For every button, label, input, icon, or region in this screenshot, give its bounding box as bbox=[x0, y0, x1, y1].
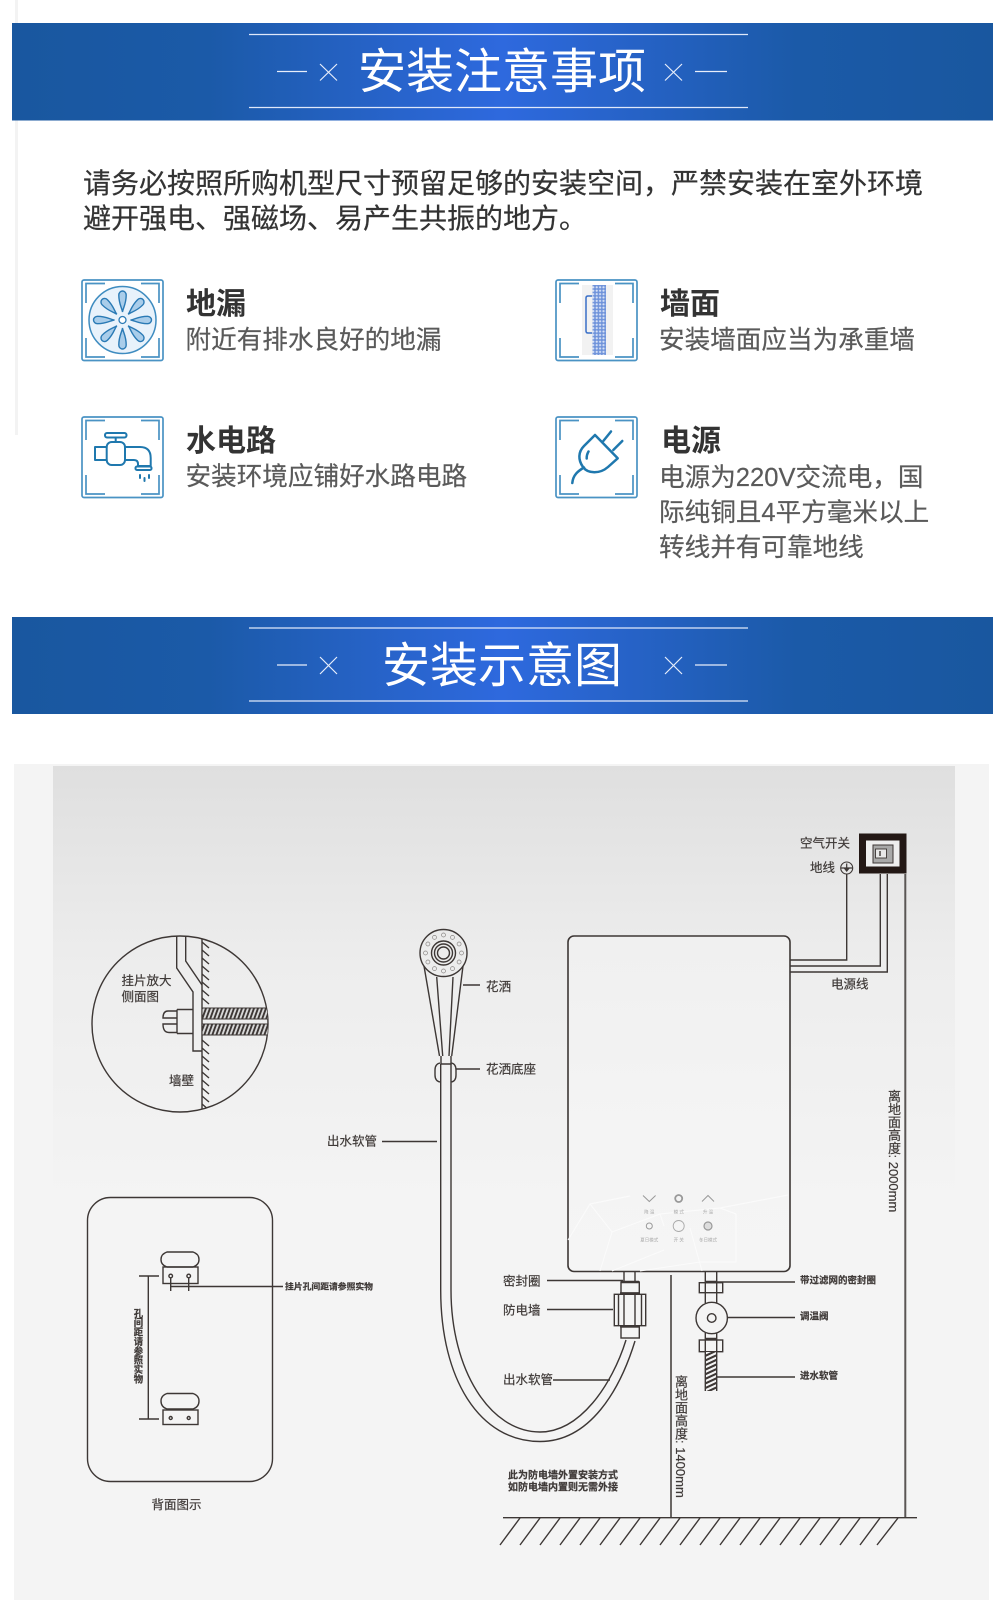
title: 安装注意事项 bbox=[358, 46, 646, 99]
label: 空气开关 bbox=[800, 836, 850, 850]
caption: 背面图示 bbox=[152, 1498, 202, 1512]
diagram: back view bbox=[88, 1198, 373, 1512]
label: 调温阀 bbox=[800, 1310, 829, 1322]
label: 侧面图 bbox=[122, 990, 159, 1004]
panel: installation diagram bbox=[14, 764, 989, 1600]
labels: outlet connector: 防电墙 bbox=[503, 1302, 541, 1318]
control panel: 开 关 bbox=[674, 1236, 684, 1244]
dimension: height 1400mm: 离地面高度: 1400mm bbox=[673, 1374, 688, 1498]
description: 附近有排水良好的地漏 bbox=[186, 326, 441, 354]
bottom hanger bbox=[161, 1394, 199, 1424]
labels: outlet connector bbox=[503, 1274, 623, 1387]
banner: 安装注意事项 bbox=[12, 23, 993, 120]
diagram: bracket side view bbox=[92, 930, 270, 1112]
description: 际纯铜且4平方毫米以上 bbox=[659, 498, 929, 527]
icon: floor drain bbox=[82, 280, 163, 360]
control panel bbox=[640, 1195, 717, 1244]
item: 水电路 bbox=[82, 417, 467, 498]
label: 挂片放大 bbox=[122, 973, 172, 988]
heading: 地漏 bbox=[186, 288, 246, 321]
leader label: 挂片孔间距请参照实物 bbox=[285, 1280, 373, 1292]
control panel: 夏日模式 bbox=[640, 1236, 659, 1244]
label: 电源线 bbox=[831, 978, 869, 992]
control panel: 升 温 bbox=[703, 1208, 714, 1216]
control panel: 降 温 bbox=[644, 1208, 655, 1216]
heading: 电源 bbox=[661, 425, 721, 458]
label: 花洒底座 bbox=[486, 1062, 536, 1076]
label: 墙壁 bbox=[169, 1073, 194, 1088]
vertical label: 孔间距请参照实物 bbox=[132, 1308, 144, 1384]
description bbox=[659, 463, 929, 562]
heading: 墙面 bbox=[660, 288, 720, 321]
labels: outlet connector: 出水软管 bbox=[503, 1372, 553, 1387]
intro text bbox=[83, 168, 923, 234]
note: 此为防电墙外置安装方式 bbox=[508, 1468, 618, 1482]
description: 安装环境应铺好水路电路 bbox=[186, 462, 467, 491]
control panel: 模 式 bbox=[674, 1208, 684, 1216]
diagram: water heater bbox=[568, 936, 790, 1272]
diagram: inlet valve and hose bbox=[696, 1272, 876, 1391]
diagram: shower head and hose bbox=[327, 930, 635, 1442]
icon: plug bbox=[556, 417, 637, 498]
dimension: height 2000mm: 离地面高度: 2000mm bbox=[886, 1089, 901, 1212]
label: 花洒 bbox=[486, 979, 511, 994]
intro text: 请务必按照所购机型尺寸预留足够的安装空间，严禁安装在室外环境 bbox=[83, 168, 923, 199]
item: 地漏 bbox=[82, 280, 441, 360]
heading: 水电路 bbox=[186, 425, 276, 458]
icon: faucet bbox=[82, 417, 163, 498]
left edge strip bbox=[15, 0, 18, 435]
label: 出水软管 bbox=[327, 1134, 377, 1148]
item: 电源 bbox=[556, 417, 929, 562]
ground line with hatch bbox=[500, 1518, 917, 1545]
diagram: outlet connector bbox=[614, 1272, 646, 1338]
labels: outlet connector: 密封圈 bbox=[503, 1274, 541, 1288]
intro text: 避开强电、强磁场、易产生共振的地方。 bbox=[83, 203, 587, 234]
control panel: 冬日模式 bbox=[699, 1236, 717, 1244]
description: 电源为220V交流电，国 bbox=[659, 463, 924, 492]
note bbox=[508, 1468, 618, 1494]
item: 墙面 bbox=[556, 280, 915, 360]
top hanger bbox=[161, 1252, 199, 1291]
banner: 安装示意图 bbox=[12, 617, 993, 714]
label: 带过滤网的密封圈 bbox=[800, 1274, 876, 1286]
description: 转线并有可靠地线 bbox=[659, 533, 864, 562]
diagram: air switch and power wires bbox=[790, 836, 903, 992]
title: 安装示意图 bbox=[382, 640, 622, 693]
icon: wall bbox=[556, 280, 637, 360]
description: 安装墙面应当为承重墙 bbox=[659, 326, 915, 354]
label: 进水软管 bbox=[800, 1370, 839, 1382]
note: 如防电墙内置则无需外接 bbox=[508, 1480, 618, 1494]
label: 地线 bbox=[810, 861, 836, 875]
